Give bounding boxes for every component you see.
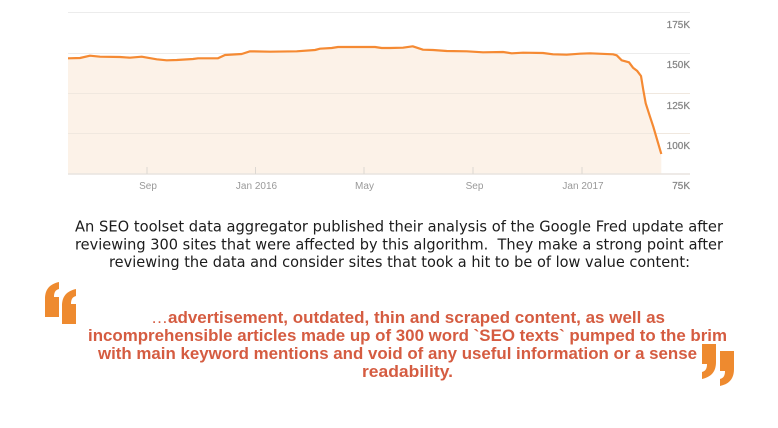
traffic line chart	[68, 12, 690, 192]
icon: opening quotation mark	[45, 282, 76, 324]
icon: closing quotation mark	[702, 344, 734, 386]
x axis labels: Sep	[139, 181, 157, 192]
pull quote: with main keyword mentions and void of any useful information or a sense	[97, 345, 697, 363]
pull quote	[88, 309, 727, 381]
chart trend line	[68, 46, 661, 154]
x axis labels	[139, 181, 604, 192]
y axis labels: 150K	[667, 60, 690, 71]
x axis labels: Sep	[466, 181, 484, 192]
intro paragraph	[75, 218, 724, 271]
intro paragraph: reviewing the data and consider sites that took a hit to be of low value content:	[109, 253, 690, 271]
y axis labels: 175K	[667, 20, 690, 31]
y axis labels: 125K	[667, 101, 690, 112]
x axis labels: Jan 2016	[236, 181, 278, 192]
x axis labels: May	[355, 181, 374, 192]
y axis labels: 100K	[667, 141, 690, 152]
y axis labels: 75K	[672, 181, 690, 192]
intro paragraph: reviewing 300 sites that were affected by this algorithm. They make a strong point after	[75, 236, 724, 254]
x axis labels: Jan 2017	[562, 181, 604, 192]
chart area fill	[68, 46, 661, 174]
intro paragraph: An SEO toolset data aggregator published their analysis of the Google Fred update after	[75, 218, 724, 236]
pull quote: incomprehensible articles made up of 300 word `SEO texts` pumped to the brim	[88, 327, 727, 345]
pull quote: readability.	[362, 363, 453, 381]
pull quote: …advertisement, outdated, thin and scraped content, as well as	[151, 309, 665, 327]
y axis labels	[667, 20, 690, 192]
